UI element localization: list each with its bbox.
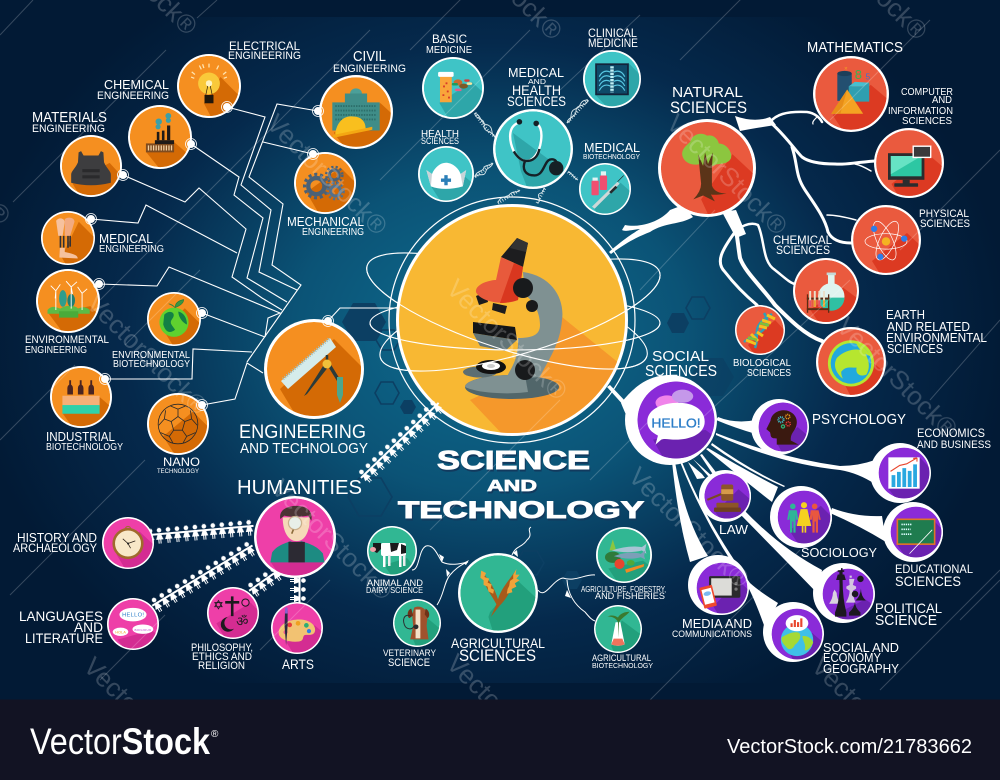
- labels: engineering: MEDICAL: [99, 231, 153, 246]
- icon: physical sciences atom: [851, 205, 921, 275]
- labels: social sciences: AND BUSINESS: [917, 439, 991, 451]
- title: AND: [487, 478, 537, 495]
- icon: medical engineering prosthetic legs: [41, 211, 95, 265]
- labels: engineering: ENGINEERING: [97, 90, 169, 102]
- labels: medical: BASIC: [432, 32, 467, 46]
- labels: natural sciences: MATHEMATICS: [807, 40, 903, 56]
- labels: agricultural: DAIRY SCIENCE: [366, 585, 423, 595]
- labels: social sciences: SCIENCES: [895, 573, 961, 589]
- labels: medical: [421, 28, 640, 161]
- icon: languages speech bubbles: HOLA: [115, 630, 126, 634]
- labels: engineering: MATERIALS: [32, 109, 107, 126]
- icon: media tv and phone: [696, 562, 749, 615]
- icon: political chess pieces: [822, 568, 875, 620]
- labels: medical: MEDICINE: [588, 38, 638, 50]
- icon: basic medicine pills: [422, 57, 484, 119]
- labels: social sciences: ECONOMICS: [917, 428, 985, 440]
- labels: social sciences: SOCIAL AND: [823, 641, 899, 655]
- labels: natural sciences: COMPUTER: [901, 87, 953, 98]
- labels: natural sciences: EARTH: [886, 308, 925, 322]
- white tapered connectors: [607, 375, 943, 662]
- icon: health sciences nurse cap: [418, 146, 474, 202]
- labels: social sciences: [645, 348, 991, 676]
- text: VectorStock®: [831, 311, 964, 444]
- labels: natural sciences: AND: [932, 95, 952, 106]
- labels: agricultural: [366, 578, 666, 670]
- labels: agricultural: BIOTECHNOLOGY: [592, 661, 653, 670]
- icon: languages speech bubbles: [107, 598, 185, 681]
- icon: languages speech bubbles: BONJOUR: [135, 628, 152, 632]
- text: VectorStock®: [806, 651, 939, 780]
- labels: engineering: CHEMICAL: [104, 77, 169, 92]
- icon: veterinary dog: [393, 599, 465, 671]
- connector wires: engineering: [91, 104, 397, 405]
- labels: engineering: ENGINEERING: [228, 50, 301, 62]
- icon: materials engineering vest: [60, 135, 122, 197]
- labels: natural sciences: SCIENCES: [747, 368, 791, 379]
- panel: social sciences: [607, 348, 991, 693]
- labels: agricultural: AND FISHERIES: [595, 591, 665, 602]
- icon: biological sciences dna: [735, 305, 785, 355]
- icon: industrial biotechnology bottles: [50, 366, 112, 428]
- icon: chemical engineering factory: [128, 105, 192, 169]
- labels: engineering: ENGINEERING: [239, 422, 366, 443]
- labels: natural sciences: SCIENCES: [920, 218, 970, 230]
- icon: philosophy religious symbols: [207, 587, 285, 670]
- labels: natural sciences: SCIENCES: [902, 116, 952, 127]
- labels: engineering: ENVIRONMENTAL: [112, 349, 190, 361]
- paper doll chains: [149, 398, 445, 614]
- icon: psychology head: [758, 402, 809, 452]
- text: VectorStock®: [81, 288, 214, 421]
- icon: electrical engineering bulb: [177, 54, 241, 118]
- icon: environmental biotechnology globe: [147, 292, 201, 346]
- labels: engineering: [25, 39, 406, 475]
- labels: humanities: HUMANITIES: [237, 477, 362, 499]
- labels: natural sciences: ENVIRONMENTAL: [886, 331, 987, 345]
- labels: social sciences: SOCIAL: [652, 348, 709, 365]
- labels: agricultural: ANIMAL AND: [367, 578, 423, 589]
- labels: engineering: ENGINEERING: [25, 344, 87, 356]
- labels: natural sciences: SCIENCES: [670, 98, 747, 117]
- icon: social sciences hello bubble: [638, 382, 717, 458]
- labels: natural sciences: AND RELATED: [887, 320, 970, 334]
- labels: engineering: ENGINEERING: [302, 227, 364, 238]
- icon: history pocket watch: [102, 517, 154, 569]
- text: VectorStock®: [623, 461, 756, 594]
- icon: languages speech bubbles: HELLO!: [122, 613, 144, 619]
- labels: natural sciences: [670, 40, 987, 379]
- labels: engineering: TECHNOLOGY: [157, 469, 199, 475]
- labels: humanities: LITERATURE: [25, 630, 103, 646]
- labels: engineering: ENGINEERING: [32, 123, 105, 135]
- orbit arcs over microscope: [355, 266, 671, 394]
- orbit ellipses behind microscope circle: [355, 229, 671, 394]
- icon: engineering ruler and compass: [264, 319, 364, 419]
- labels: medical: HEALTH: [512, 83, 561, 98]
- labels: medical: SCIENCES: [507, 94, 566, 109]
- title: TECHNOLOGY: [398, 497, 644, 524]
- labels: social sciences: SCIENCES: [645, 363, 717, 380]
- labels: natural sciences: CHEMICAL: [773, 233, 832, 247]
- labels: engineering: ENVIRONMENTAL: [25, 334, 109, 346]
- footer registered mark: ®: [211, 729, 219, 740]
- icon: agricultural biotechnology flask: [594, 605, 666, 682]
- labels: social sciences: SOCIOLOGY: [801, 545, 877, 560]
- decorative hexagons: [342, 297, 734, 589]
- labels: social sciences: ECONOMY: [823, 651, 882, 665]
- icon: computer monitor: [874, 128, 944, 198]
- labels: engineering: ENGINEERING: [333, 63, 406, 75]
- icon: philosophy religious symbols: ॐ: [236, 614, 248, 629]
- labels: humanities: AND: [74, 619, 103, 635]
- panel: medical and health sciences: [418, 28, 641, 215]
- labels: engineering: ENGINEERING: [99, 243, 164, 255]
- labels: social sciences: MEDIA AND: [682, 617, 752, 631]
- labels: social sciences: PSYCHOLOGY: [812, 412, 906, 428]
- labels: agricultural: AGRICULTURE, FORESTRY,: [581, 584, 666, 594]
- vines: [412, 527, 595, 621]
- labels: engineering: INDUSTRIAL: [46, 430, 115, 444]
- icon: mathematics shapes: 8: [855, 67, 862, 82]
- icon: arts palette: [271, 602, 349, 685]
- labels: agricultural: SCIENCE: [388, 657, 430, 669]
- labels: humanities: ARTS: [282, 656, 314, 672]
- icon: agriculture fish and vegetables: [596, 527, 680, 617]
- labels: medical: SCIENCES: [421, 136, 459, 146]
- labels: humanities: HISTORY AND: [17, 530, 97, 545]
- icon: civil engineering building: [319, 75, 393, 149]
- icon: agricultural wheat: [458, 553, 578, 673]
- icon: sociology paper people: [778, 490, 832, 544]
- labels: social sciences: POLITICAL: [875, 600, 942, 616]
- labels: humanities: ARCHAEOLOGY: [13, 541, 97, 555]
- labels: engineering: MECHANICAL: [287, 214, 364, 229]
- footer logo: VectorStock: [30, 721, 210, 762]
- connector dots: [86, 102, 334, 410]
- icon: environmental engineering wind turbines: [36, 269, 100, 333]
- panel: engineering and technology: [26, 42, 406, 473]
- text: VectorStock®: [78, 651, 211, 780]
- icon: educational chalkboard: [890, 506, 943, 558]
- tree branches: [609, 112, 875, 341]
- footer url: VectorStock.com/21783662: [727, 736, 972, 758]
- icon: geography globe and chart: [772, 608, 824, 661]
- labels: engineering: CIVIL: [353, 48, 386, 65]
- title: SCIENCE: [437, 445, 590, 475]
- labels: social sciences: GEOGRAPHY: [823, 662, 900, 676]
- labels: engineering: BIOTECHNOLOGY: [113, 358, 190, 370]
- labels: agricultural: VETERINARY: [383, 648, 436, 658]
- labels: natural sciences: SCIENCES: [887, 342, 943, 356]
- labels: humanities: ETHICS AND: [192, 651, 252, 663]
- icon: law gavel: [704, 474, 751, 518]
- labels: agricultural: AGRICULTURAL: [451, 636, 545, 651]
- title: [398, 445, 644, 524]
- icon: earth globe: [816, 327, 886, 397]
- labels: natural sciences: INFORMATION: [888, 106, 953, 117]
- icon: chemical sciences flask: [793, 258, 859, 324]
- labels: social sciences: EDUCATIONAL: [895, 564, 974, 576]
- labels: natural sciences: PHYSICAL: [919, 208, 969, 220]
- labels: natural sciences: NATURAL: [672, 84, 743, 101]
- text: VectorStock®: [441, 273, 574, 406]
- labels: natural sciences: SCIENCES: [776, 243, 830, 257]
- icon: medical and health stethoscope: [493, 109, 573, 189]
- labels: social sciences: COMMUNICATIONS: [672, 629, 752, 640]
- labels: social sciences: SCIENCE: [875, 612, 937, 629]
- labels: social sciences: LAW: [719, 522, 749, 537]
- dna connectors: [475, 100, 588, 203]
- icon: natural sciences tree: [658, 119, 756, 217]
- labels: humanities: [13, 477, 362, 672]
- panel: humanities: [13, 398, 445, 685]
- labels: humanities: PHILOSOPHY,: [191, 642, 253, 654]
- labels: medical: MEDICAL: [584, 141, 640, 155]
- labels: medical: MEDICINE: [426, 44, 472, 56]
- labels: natural sciences: BIOLOGICAL: [733, 358, 791, 369]
- icon: animal cow: [367, 526, 422, 591]
- icon: medical biotechnology syringe: [579, 163, 631, 215]
- icon: clinical medicine x-ray: [583, 50, 641, 108]
- labels: engineering: ELECTRICAL: [229, 39, 300, 53]
- labels: humanities: RELIGION: [198, 660, 245, 672]
- panel: agricultural sciences: [366, 526, 680, 682]
- footer band: [0, 700, 1000, 780]
- icon: mathematics shapes: ×: [844, 65, 848, 72]
- labels: humanities: LANGUAGES: [19, 608, 103, 624]
- labels: agricultural: SCIENCES: [459, 646, 536, 665]
- text: VectorStock®: [661, 108, 794, 241]
- icon: social sciences hello bubble: HELLO!: [651, 415, 701, 430]
- text: VectorStock®: [441, 648, 574, 780]
- labels: medical: BIOTECHNOLOGY: [583, 152, 640, 161]
- labels: medical: HEALTH: [421, 128, 459, 140]
- icon: mathematics shapes: [813, 56, 889, 132]
- icon: humanities person with magnifier: [254, 496, 336, 578]
- labels: medical: AND: [528, 79, 546, 86]
- icon: economics chart: [878, 448, 931, 498]
- text: VectorStock®: [266, 473, 399, 606]
- labels: agricultural: AGRICULTURAL: [592, 653, 651, 663]
- text: VectorStock®: [261, 108, 394, 241]
- icon: mathematics shapes: 5: [865, 72, 870, 82]
- central microscope circle: [389, 197, 635, 455]
- labels: engineering: NANO: [163, 455, 200, 469]
- labels: medical: CLINICAL: [588, 28, 638, 40]
- icon: microscope: [463, 238, 562, 399]
- labels: engineering: AND TECHNOLOGY: [240, 441, 368, 457]
- panel: natural sciences: [609, 42, 987, 397]
- labels: medical: MEDICAL: [508, 65, 564, 80]
- icon: mechanical engineering gears: [294, 152, 356, 214]
- labels: engineering: BIOTECHNOLOGY: [46, 442, 123, 453]
- icon: nano technology buckyball: [147, 393, 209, 455]
